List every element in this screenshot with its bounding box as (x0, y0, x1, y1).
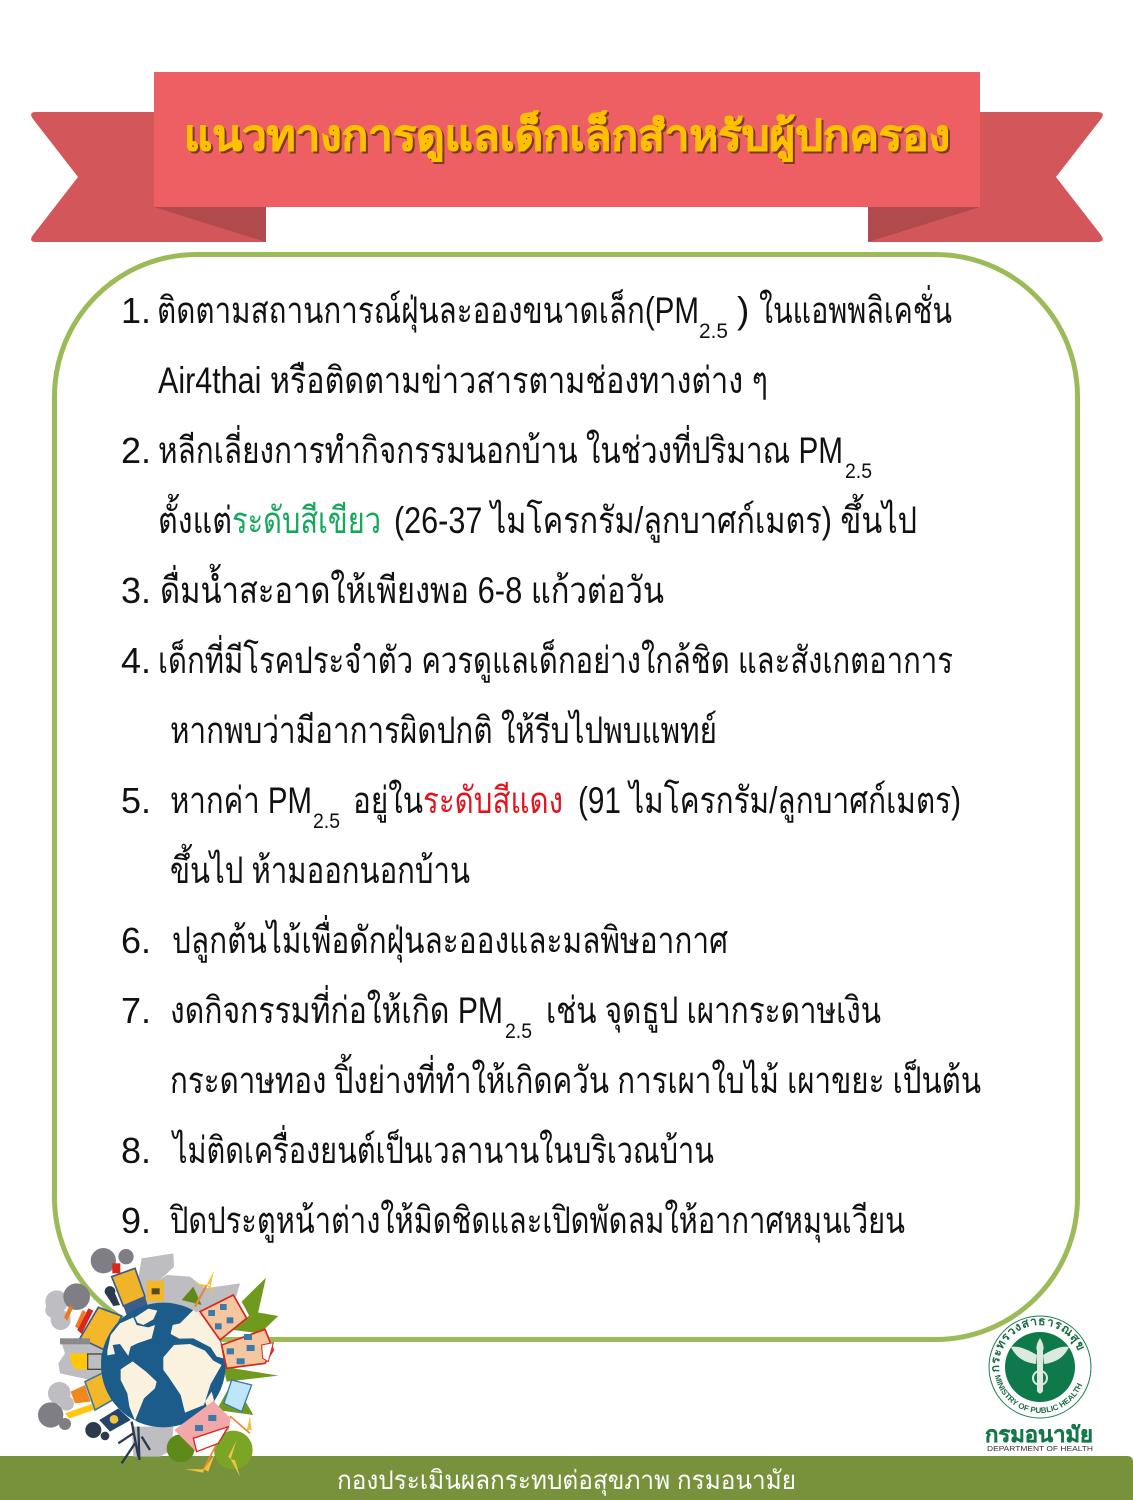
panel: rounded green outline (54, 254, 1078, 1340)
list item 7: งดกิจกรรมที่ก่อให้เกิด PM (170, 984, 503, 1031)
list item 9: ปิดประตูหน้าต่างให้มิดชิดและเปิดพัดลมให้อากาศหมุนเวียน (169, 1199, 905, 1243)
building upper right (200, 1295, 247, 1340)
list item 5: หากค่า PM (170, 780, 312, 821)
globe ocean (101, 1303, 226, 1427)
list item 5: (91 ไมโครกรัม/ลูกบาศก์เมตร) (578, 779, 961, 823)
list item 7: 7. (121, 990, 151, 1031)
list item 8 (121, 1124, 714, 1171)
logo: department wordmark: กรมอนามัย (985, 1422, 1093, 1447)
factory left upper (60, 1286, 122, 1351)
list item 1 (121, 284, 952, 401)
list item 3: 3. (121, 570, 151, 611)
list item 3 (121, 563, 664, 611)
title: แนวทางการดูแลเด็กเล็กสำหรับผู้ปกครอง (186, 112, 952, 164)
list item 1: 2.5 (699, 320, 728, 343)
list item 5: 2.5 (313, 810, 340, 833)
factory left lower (65, 1373, 131, 1432)
list item 2: หลีกเลี่ยงการทำกิจกรรมนอกบ้าน ในช่วงที่ปริมาณ PM (158, 424, 843, 471)
list item 2: ระดับสีเขียว (232, 500, 381, 541)
list item 2: 2. (121, 430, 151, 471)
logo: ministry of public health seal (988, 1316, 1092, 1418)
footer text: กองประเมินผลกระทบต่อสุขภาพ กรมอนามัย (337, 1465, 796, 1496)
list item 7 (121, 984, 981, 1101)
list item 1: 1. (121, 290, 151, 331)
list item 4: 4. (121, 640, 151, 681)
list item 1: ) (737, 290, 749, 331)
list item 5: อยู่ใน (353, 779, 423, 823)
list item 1: ในแอพพลิเคชั่น (759, 284, 952, 331)
banner ribbon (31, 72, 1103, 242)
list item 2 (121, 424, 917, 543)
list item 7: 2.5 (505, 1020, 532, 1043)
factory left middle (70, 1353, 102, 1369)
footer bar (0, 1456, 1133, 1500)
title: แนวทางการดูแลเด็กเล็กสำหรับผู้ปกครอง (184, 110, 950, 162)
factory top (112, 1263, 164, 1315)
building right (222, 1329, 273, 1368)
list item 9: 9. (121, 1200, 151, 1241)
list item 5: ระดับสีแดง (423, 780, 563, 821)
list item 7: เช่น จุดธูป เผากระดาษเงิน (546, 990, 881, 1033)
list item 5: ขึ้นไป ห้ามออกนอกบ้าน (170, 843, 470, 891)
solar panel (224, 1380, 252, 1412)
list item 3: ดื่มน้ำสะอาดให้เพียงพอ 6-8 แก้วต่อวัน (160, 563, 664, 611)
list item 8: ไม่ติดเครื่องยนต์เป็นเวลานานในบริเวณบ้าน (171, 1124, 714, 1171)
list item 4 (121, 634, 953, 751)
dark smoke puffs (38, 1248, 134, 1430)
list item 6 (121, 914, 728, 963)
list item 5: 5. (121, 780, 151, 821)
dead tree (118, 1422, 150, 1463)
wind turbines (185, 1271, 252, 1477)
list item 8: 8. (121, 1130, 151, 1171)
list item 1: ติดตามสถานการณ์ฝุ่นละอองขนาดเล็ก(PM (157, 287, 699, 333)
list item 6: ปลูกต้นไม้เพื่อดักฝุ่นละอองและมลพิษอากาศ (172, 914, 728, 963)
logo: ministry of public health seal: กระทรวงสาธารณสุข (992, 1318, 1084, 1372)
list item 2: (26-37 ไมโครกรัม/ลูกบาศก์เมตร) ขึ้นไป (394, 493, 917, 543)
illustration: polluted globe (38, 1248, 278, 1477)
logo: department wordmark: DEPARTMENT OF HEALTH (987, 1444, 1093, 1453)
list item 1: Air4thai หรือติดตามข่าวสารตามช่องทางต่าง ๆ (158, 360, 768, 401)
list item 6: 6. (121, 920, 151, 961)
smoke clouds (45, 1253, 240, 1457)
building lower (175, 1402, 230, 1452)
list item 2: 2.5 (845, 460, 872, 483)
list item 5 (121, 779, 961, 891)
list item 2: ตั้งแต่ (158, 493, 232, 541)
coal smoke (85, 1422, 109, 1440)
logo: ministry of public health seal: MINISTRY OF PUBLIC HEALTH (994, 1374, 1082, 1414)
continents (107, 1309, 223, 1421)
list item 4: หากพบว่ามีอาการผิดปกติ ให้รีบไปพบแพทย์ (170, 709, 717, 751)
green trees back (167, 1278, 278, 1469)
